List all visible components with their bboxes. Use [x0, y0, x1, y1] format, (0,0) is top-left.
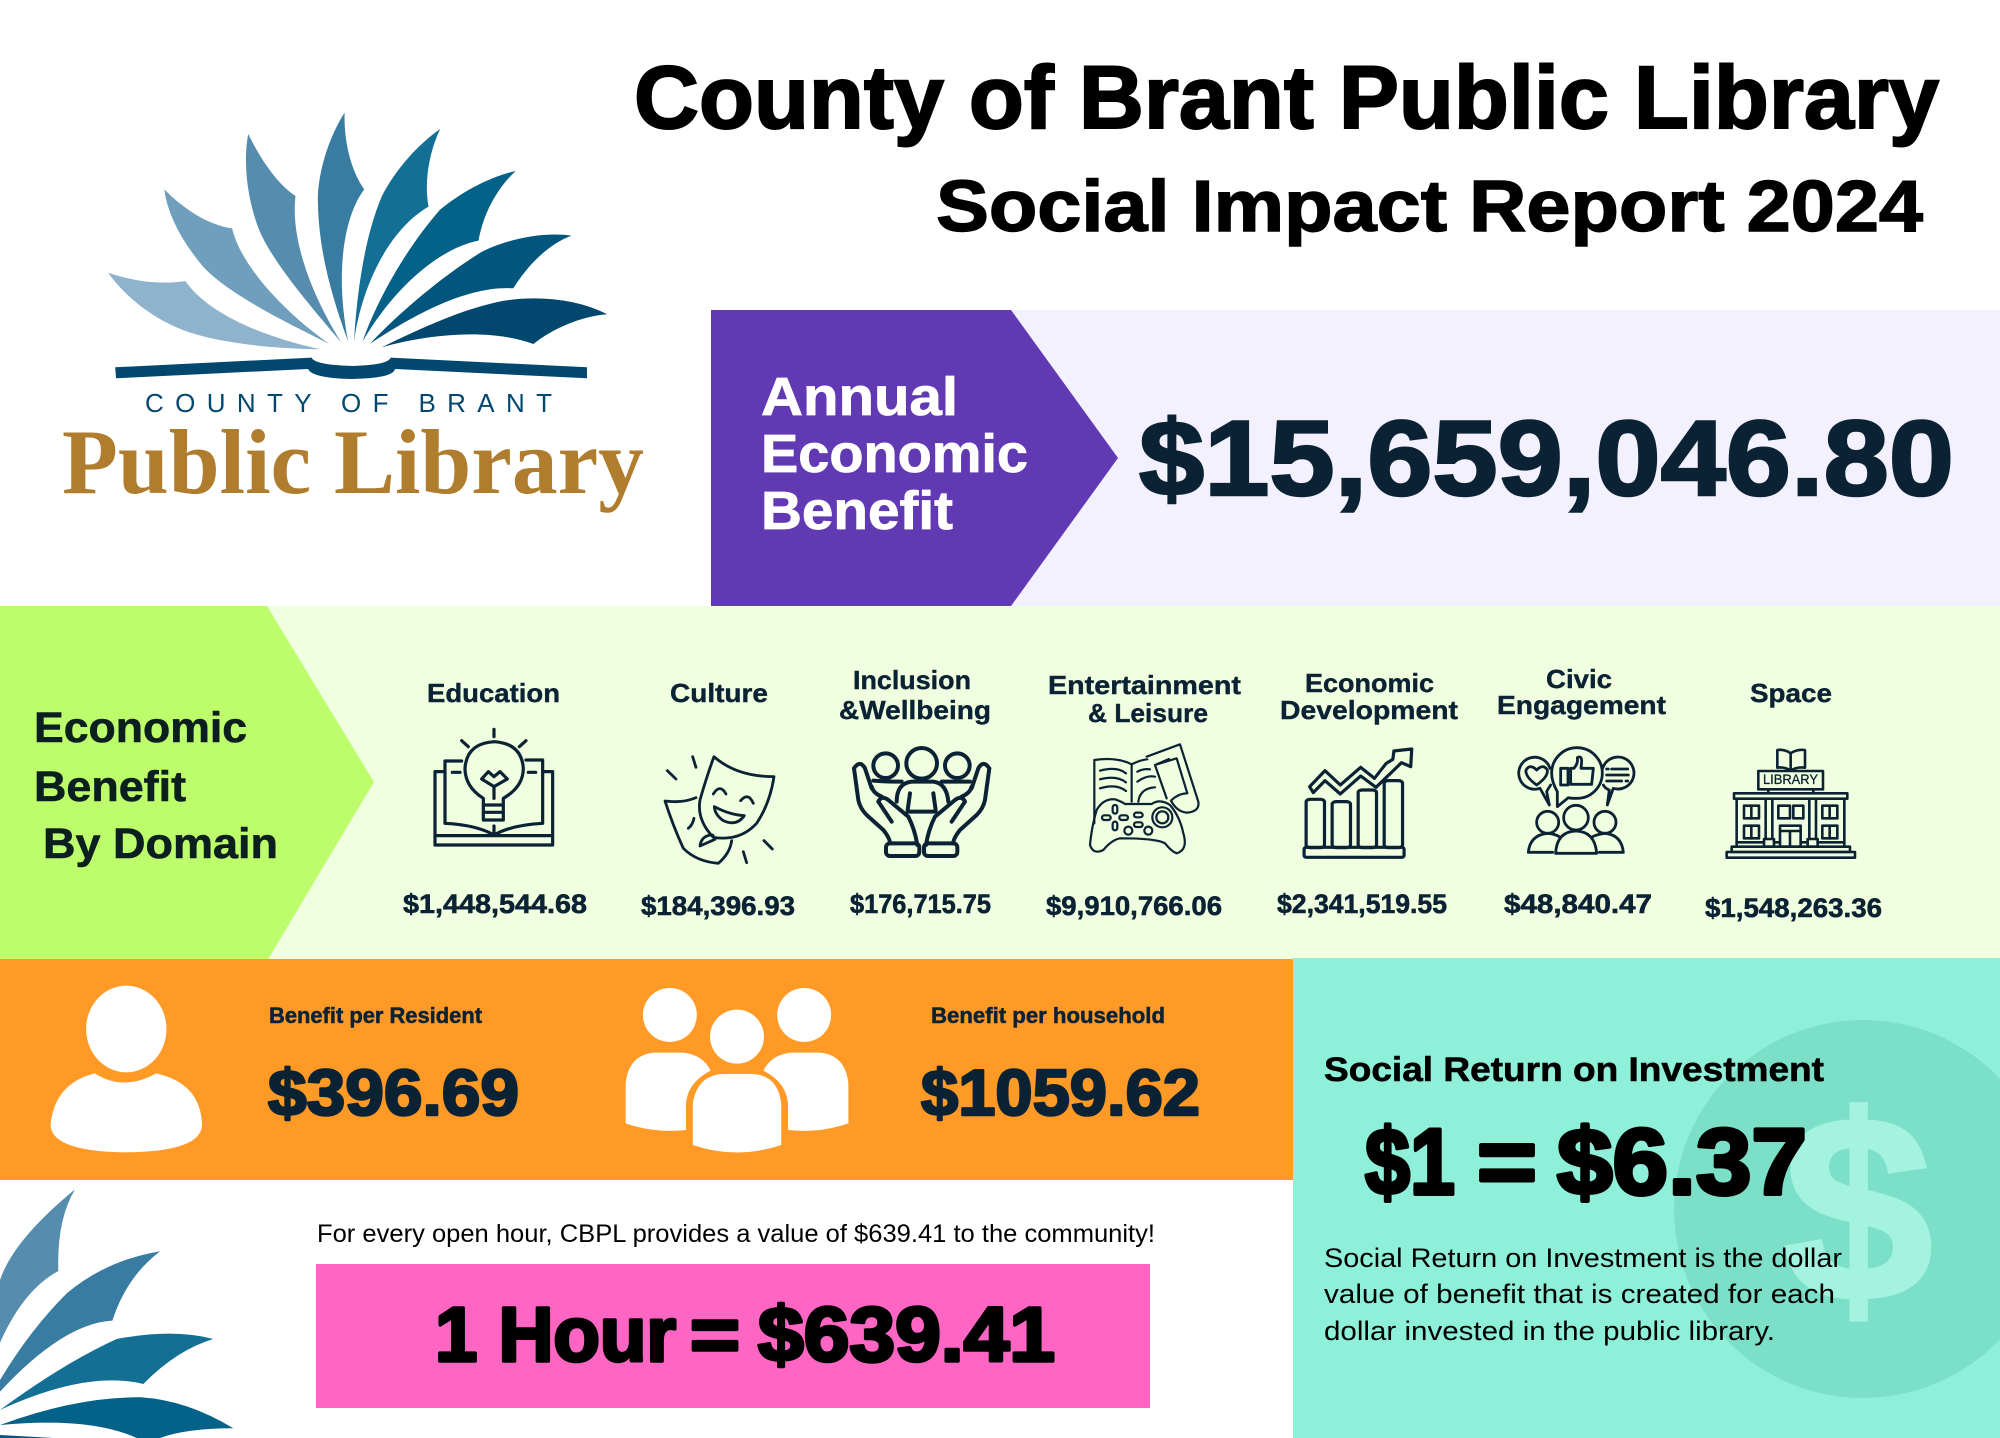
- panel: economic benefit by domain: [0, 606, 2000, 961]
- logo text: Public Library: Public Library: [62, 411, 644, 513]
- logo icon: open book with fanned pages: [108, 113, 607, 379]
- domain: Education: $1,448,544.68: [403, 889, 587, 919]
- icon: theatre masks: [665, 757, 774, 863]
- panel background: [0, 606, 2000, 960]
- icon: library building: [1727, 750, 1855, 858]
- domain: Culture: Culture: [670, 678, 768, 708]
- domain: Economic Development: [1277, 668, 1458, 919]
- icon: hands holding people: [854, 748, 989, 856]
- text: explanation: dollar invested in the public library.: [1324, 1316, 1775, 1346]
- domain: Entertainment and Leisure: & Leisure: [1088, 698, 1208, 728]
- value: one dollar equals: $6.37: [1557, 1109, 1807, 1214]
- domain: Culture: $184,396.93: [641, 891, 795, 921]
- domain: Economic Development: Development: [1280, 695, 1458, 725]
- domain: Space: [1705, 678, 1882, 923]
- value: benefit per household: $1059.62: [921, 1056, 1200, 1129]
- value: benefit per resident: $396.69: [268, 1056, 519, 1129]
- icon: rising bar chart: [1304, 749, 1412, 857]
- text: explanation: value of benefit that is created for each: [1324, 1279, 1835, 1309]
- domain: Education: [403, 678, 587, 919]
- label: Economic Benefit By Domain: Economic: [34, 704, 247, 752]
- watermark: logo pages bottom left: [0, 1189, 233, 1438]
- icon: book and lightbulb: [435, 729, 553, 845]
- icon: speech bubbles and people: [1519, 748, 1634, 853]
- decorative coin circle: [1674, 1020, 2000, 1398]
- domain: Space: $1,548,263.36: [1705, 893, 1882, 923]
- subtitle: Social Impact Report 2024: [936, 167, 1923, 247]
- pink banner: [316, 1264, 1150, 1408]
- icons: person and group: [51, 986, 848, 1152]
- icon: book, music and game controller: [1090, 744, 1199, 853]
- lime arrow label: [0, 606, 374, 961]
- sign text: Library: LIBRARY: [1763, 771, 1819, 787]
- label: Economic Benefit By Domain: Benefit: [34, 763, 186, 811]
- label: Annual Economic Benefit: Economic: [761, 424, 1028, 484]
- purple arrow label: [711, 310, 1118, 606]
- text: explanation: Social Return on Investment is the dollar: [1324, 1243, 1842, 1273]
- label: Economic Benefit By Domain: By Domain: [43, 820, 278, 868]
- banner value: one hour: =: [690, 1292, 740, 1378]
- domain: Space: Space: [1750, 678, 1832, 708]
- orange band: [0, 959, 1293, 1180]
- panel: value per open hour: [316, 1220, 1155, 1408]
- icon: group of people: [626, 988, 848, 1152]
- text: value per open hour: For every open hour, CBPL provides a value of $639.41 to the community!: [317, 1220, 1155, 1248]
- value: one dollar equals: [1365, 1109, 1807, 1214]
- domain: Inclusion and Wellbeing: $176,715.75: [850, 889, 991, 919]
- panel background: [1293, 958, 2000, 1438]
- domain: Entertainment and Leisure: Entertainment: [1048, 670, 1241, 700]
- domain: Inclusion and Wellbeing: Inclusion: [853, 665, 971, 695]
- banner value: one hour: $639.41: [758, 1292, 1055, 1378]
- text: explanation: [1324, 1243, 1842, 1346]
- domain: Culture: [641, 678, 795, 921]
- banner value: one hour: [435, 1292, 1055, 1378]
- panel background: [1000, 310, 2000, 606]
- value: one dollar equals: $1: [1365, 1109, 1455, 1214]
- value: one dollar equals: =: [1477, 1109, 1537, 1214]
- label: Annual Economic Benefit: [761, 367, 1028, 541]
- domain: Education: Education: [427, 678, 560, 708]
- domain: Inclusion and Wellbeing: [839, 665, 991, 919]
- panel: social return on investment: [1293, 958, 2000, 1438]
- label: Annual Economic Benefit: Annual: [761, 367, 958, 427]
- domain: Inclusion and Wellbeing: &Wellbeing: [839, 695, 991, 725]
- domain: Economic Development: $2,341,519.55: [1277, 889, 1447, 919]
- heading: social return on investment: Social Return on Investment: [1324, 1051, 1824, 1089]
- logo: County of Brant Public Library: [62, 113, 644, 513]
- logo text: County of Brant: COUNTY OF BRANT: [145, 388, 552, 418]
- domain: Civic Engagement: [1497, 664, 1666, 919]
- decorative dollar sign: $: [1783, 1061, 1933, 1356]
- domain: Civic Engagement: Engagement: [1497, 690, 1666, 720]
- label: Annual Economic Benefit: Benefit: [761, 481, 953, 541]
- domain: Entertainment and Leisure: [1046, 670, 1241, 921]
- amount: annual benefit: $15,659,046.80: [1139, 398, 1954, 518]
- domain: Civic Engagement: Civic: [1546, 664, 1612, 694]
- label: Economic Benefit By Domain: [34, 704, 278, 868]
- title: County of Brant Public Library: [634, 47, 1940, 147]
- banner value: one hour: 1 Hour: [435, 1292, 676, 1378]
- label: benefit per household: Benefit per household: [931, 1003, 1165, 1028]
- panel: benefit per resident and household: [0, 959, 1293, 1180]
- domain: Economic Development: Economic: [1305, 668, 1434, 698]
- domain: Entertainment and Leisure: $9,910,766.06: [1046, 891, 1222, 921]
- label: benefit per resident: Benefit per Resident: [269, 1003, 483, 1028]
- panel: annual economic benefit: [711, 310, 2000, 606]
- domain: Civic Engagement: $48,840.47: [1504, 889, 1652, 919]
- icon: person: [51, 986, 202, 1152]
